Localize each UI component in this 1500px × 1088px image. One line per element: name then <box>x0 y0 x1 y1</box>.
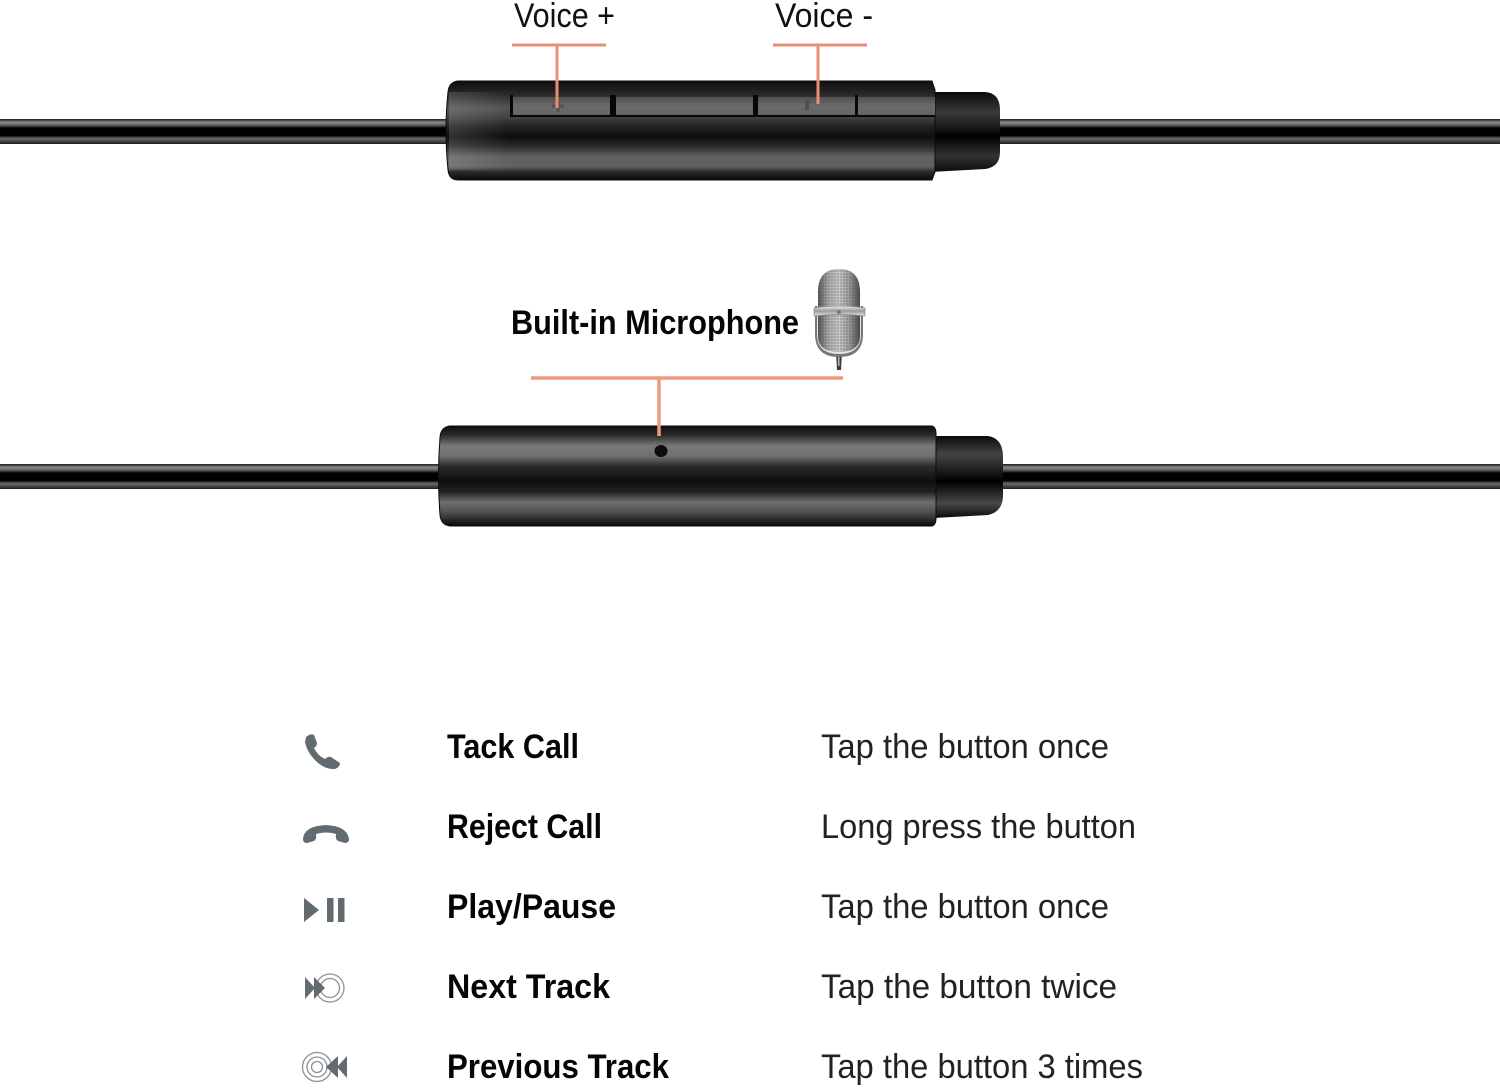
remote control: back view with microphone hole <box>0 426 1500 526</box>
strain relief collar <box>930 92 1000 172</box>
icon: phone answer <box>305 734 340 769</box>
button strip <box>510 95 935 117</box>
row: Next Track <box>305 968 1117 1006</box>
row: Previous Track <box>302 1048 1143 1086</box>
strain relief collar <box>934 436 1003 518</box>
row: Next Track: Next Track <box>447 968 610 1006</box>
cable right <box>1001 464 1500 489</box>
remote body <box>438 426 936 526</box>
icon: next track <box>305 974 344 1002</box>
row: Reject Call <box>303 808 1136 846</box>
callout line: Voice + <box>512 45 606 108</box>
row: Play/Pause: Play/Pause <box>447 888 616 926</box>
icon: previous track <box>302 1052 347 1082</box>
icon: phone hang up <box>303 825 349 843</box>
icon: microphone <box>814 269 865 370</box>
row: Play/Pause: Tap the button once <box>821 888 1109 926</box>
row: Reject Call: Long press the button <box>821 808 1136 846</box>
remote control: top view with buttons <box>0 81 1500 180</box>
row: Previous Track: Tap the button 3 times <box>821 1048 1143 1086</box>
row: Next Track: Tap the button twice <box>821 968 1117 1006</box>
label: Voice - <box>773 0 873 104</box>
cable left <box>0 464 442 489</box>
cable right <box>998 119 1500 144</box>
row: Tack Call: Tack Call <box>447 728 579 766</box>
callout line: microphone <box>531 378 843 436</box>
row: Reject Call: Reject Call <box>447 808 602 846</box>
label: Built-in Microphone: Built-in Microphone <box>511 304 799 342</box>
label: Built-in Microphone <box>511 304 843 436</box>
cable left <box>0 119 448 144</box>
label: Voice + <box>512 0 615 108</box>
microphone hole <box>654 445 668 457</box>
remote body <box>446 81 935 180</box>
row: Previous Track: Previous Track <box>447 1048 669 1086</box>
row: Tack Call <box>305 728 1109 769</box>
icon: play pause <box>304 898 344 922</box>
row: Tack Call: Tap the button once <box>821 728 1109 766</box>
callout line: Voice - <box>773 45 867 104</box>
row: Play/Pause <box>304 888 1109 926</box>
